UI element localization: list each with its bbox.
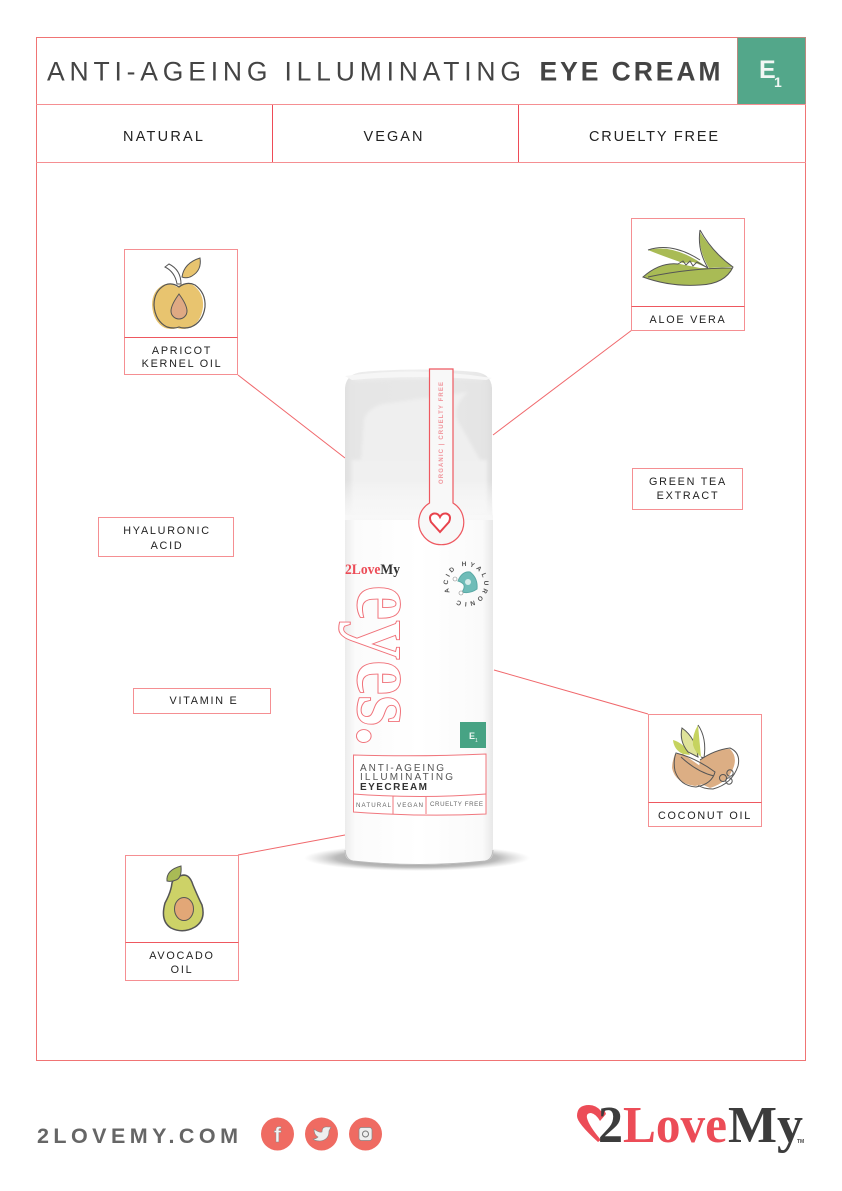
half shell xyxy=(672,754,713,786)
title: ANTI-AGEING ILLUMINATING xyxy=(47,56,521,86)
bottle label: ANTI-AGEING xyxy=(360,763,444,774)
bottle label: NATURAL xyxy=(356,802,392,809)
ingredient card: avocado oil: AVOCADO xyxy=(149,950,215,962)
product: bottle xyxy=(310,368,524,870)
bottle label: CRUELTY FREE xyxy=(430,801,483,808)
bottle badge xyxy=(460,722,486,748)
ingredient card: coconut oil: COCONUT OIL xyxy=(658,810,752,822)
brand logo: 2 xyxy=(598,1097,623,1154)
ingredient card: aloe vera: ALOE VERA xyxy=(650,314,726,326)
icon: instagram xyxy=(349,1118,382,1150)
bottle label: ILLUMINATING xyxy=(360,772,453,783)
attribute row: NATURAL xyxy=(123,129,203,145)
brand logo: My xyxy=(728,1097,803,1154)
icon: logo heart xyxy=(577,1105,606,1142)
ingredient card: apricot kernel oil: KERNEL OIL xyxy=(142,358,222,370)
brand logo: Love xyxy=(623,1097,727,1154)
icon: avocado xyxy=(163,866,203,931)
title: EYE CREAM xyxy=(540,56,720,86)
icon: twitter xyxy=(305,1118,338,1150)
outer frame xyxy=(36,38,806,1060)
badge: E1 xyxy=(738,38,806,104)
icon: facebook: f xyxy=(274,1124,282,1147)
connector lines xyxy=(238,330,648,855)
leaves xyxy=(673,740,690,755)
whole coconut xyxy=(697,749,735,788)
ingredient card: apricot kernel oil: APRICOT xyxy=(152,345,212,357)
ingredient tag: hyaluronic acid: ACID xyxy=(151,540,183,552)
ingredient card: avocado oil: OIL xyxy=(171,964,193,976)
hyaluronic acid seal: ACID HYALURONIC xyxy=(444,562,489,606)
attribute row: VEGAN xyxy=(364,129,422,145)
ingredient tag: green tea extract xyxy=(632,468,742,510)
brand logo: TM xyxy=(797,1139,804,1145)
bottle badge: 1 xyxy=(475,738,478,744)
bottle body xyxy=(345,515,493,865)
ingredient card: apricot kernel oil xyxy=(124,250,238,374)
ingredient tag: green tea extract: EXTRACT xyxy=(657,490,719,502)
brand logo xyxy=(577,1097,804,1154)
bottle label: VEGAN xyxy=(397,802,423,809)
ingredient tag: green tea extract: GREEN TEA xyxy=(649,476,727,488)
ingredient tag: hyaluronic acid xyxy=(98,518,234,556)
ingredient tag: vitamin e xyxy=(134,688,270,714)
bottle cap xyxy=(345,370,493,520)
ingredient card: avocado oil xyxy=(126,856,238,980)
footer: website: 2LOVEMY.COM xyxy=(37,1124,238,1148)
attribute row xyxy=(36,104,806,162)
icon: coconut xyxy=(672,725,739,789)
badge: E1: 1 xyxy=(774,74,782,90)
eyes wordmark: eyes. xyxy=(338,585,437,746)
bottle logo: 2LoveMy xyxy=(345,562,401,578)
icon: aloe leaves xyxy=(643,230,733,285)
ingredient tag: hyaluronic acid: HYALURONIC xyxy=(123,525,211,537)
ingredient tag: vitamin e: VITAMIN E xyxy=(170,695,238,707)
bottle shadow xyxy=(304,845,530,871)
ingredient card: aloe vera xyxy=(632,218,744,330)
icon: apricot xyxy=(152,258,205,329)
attribute row: CRUELTY FREE xyxy=(589,129,718,145)
bottle label xyxy=(354,754,486,815)
ingredient card: coconut oil xyxy=(648,714,762,826)
social icons xyxy=(261,1118,382,1150)
cap strap: ORGANIC | CRUELTY FREE xyxy=(439,382,445,484)
badge: E1: E xyxy=(759,56,776,84)
bottle label: EYECREAM xyxy=(360,782,427,793)
cap strap xyxy=(419,369,464,545)
bottle badge: E xyxy=(469,731,475,741)
